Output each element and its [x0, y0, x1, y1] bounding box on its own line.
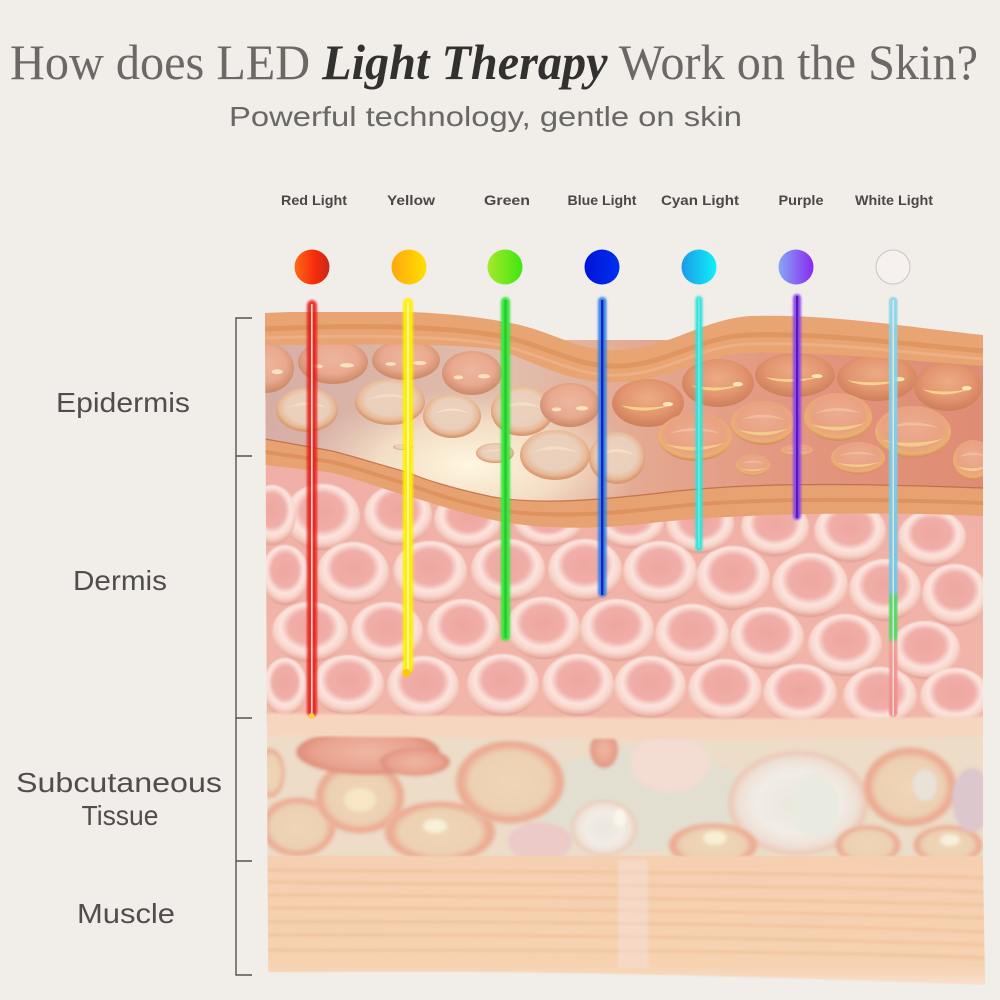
- yellow light beam: [402, 298, 413, 677]
- subtitle: Powerful technology, gentle on skin: [229, 101, 742, 132]
- light labels: Cyan Light: [661, 192, 739, 208]
- dermis layer: [248, 440, 990, 727]
- light labels: White Light: [855, 192, 933, 208]
- light labels: Purple: [778, 192, 824, 208]
- layer labels: Muscle: [77, 898, 175, 929]
- light labels: Blue Light: [568, 192, 637, 208]
- lower epidermis band: [265, 439, 983, 528]
- light labels: Red Light: [281, 192, 347, 208]
- dermis-subcutaneous boundary: [266, 713, 986, 739]
- blue light beam: [598, 297, 606, 597]
- purple light beam: [793, 294, 801, 520]
- light labels: Yellow: [387, 192, 435, 208]
- green light beam: [501, 297, 510, 641]
- title: How does LED Light Therapy Work on the Skin?: [10, 34, 978, 90]
- light labels: Green: [484, 192, 530, 208]
- skin cross-section: [238, 311, 993, 985]
- subcutaneous layer: [267, 735, 983, 857]
- layer labels: Subcutaneous: [16, 767, 222, 798]
- light colour dots: [294, 250, 910, 284]
- epidermis layer: [265, 340, 983, 500]
- muscle layer: [266, 856, 986, 985]
- white light beam: [889, 297, 898, 717]
- upper epidermis band: [265, 311, 983, 382]
- layer labels: Tissue: [82, 800, 158, 831]
- red light beam: [307, 300, 317, 719]
- light labels: [281, 192, 933, 208]
- layer labels: Epidermis: [56, 387, 190, 418]
- layer labels: Dermis: [73, 565, 167, 596]
- layer labels: [16, 387, 222, 929]
- cyan light beam: [696, 296, 702, 551]
- layer bracket: [236, 318, 252, 975]
